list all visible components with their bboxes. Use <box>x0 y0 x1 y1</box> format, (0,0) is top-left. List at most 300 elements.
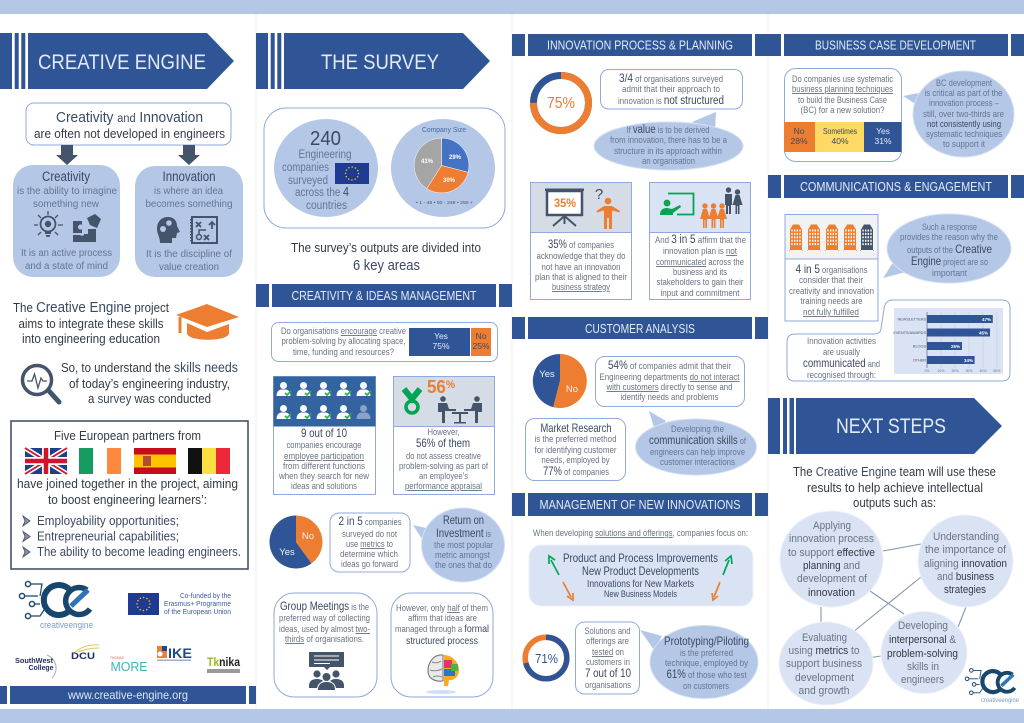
panel: innovation: is where an idea <box>154 185 223 197</box>
bullets <box>23 514 241 559</box>
banner: The Survey <box>256 33 490 89</box>
node: interpersonal skills: Developing <box>898 620 948 632</box>
panel: 9 out of 10: from different functions <box>283 461 365 471</box>
panel: communication channels <box>787 300 1010 381</box>
circle: company size pie: 30% <box>443 178 456 184</box>
callout: prototyping: on customers <box>683 681 729 691</box>
panel: creativity: It is an active process <box>21 247 112 259</box>
panel: group meetings: preferred way of collecting <box>279 613 370 623</box>
text box: tested on customers: tested on <box>592 647 624 657</box>
node: planning: planning and <box>803 560 860 572</box>
pie: metrics yes/no: No <box>302 531 314 542</box>
bar chart: 30% <box>965 369 973 373</box>
banner: The Survey: THE SURVEY <box>321 51 439 74</box>
circle: company size pie: • 1 - 49 • 50 - 249 • 250 + <box>416 200 473 205</box>
panel: 4 in 5: consider that their <box>799 275 863 285</box>
icon: head with gears <box>157 217 180 243</box>
panel: formal process: However, only half of them <box>396 603 488 613</box>
callout: BC development: to support it <box>943 139 985 149</box>
circle: 240 companies: across the 4 <box>295 185 349 199</box>
callout: why Creative Engine <box>883 214 1011 283</box>
text: skills needs: So, to understand the skills needs <box>61 360 238 375</box>
bar chart: 47% <box>982 317 991 322</box>
bar chart: BLOGS <box>913 344 926 348</box>
panel: communication channels: Innovation activities <box>807 336 876 346</box>
logo: Creative Engine <box>19 581 93 630</box>
panel: formal process: managed through a formal <box>395 623 489 635</box>
header: communications <box>768 175 1024 198</box>
panel: 56 percent: problem-solving as part of <box>399 461 488 471</box>
text box: not structured <box>600 70 742 109</box>
text box: tested on customers <box>576 622 640 694</box>
logo: DCU: DCU <box>71 651 95 661</box>
text: skills needs <box>61 360 238 406</box>
panel: communication channels: recognised through: <box>807 370 876 380</box>
node: alignment: aligning innovation <box>924 558 1007 570</box>
header: creativity and ideas: CREATIVITY & IDEAS MANAGEMENT <box>292 289 477 303</box>
header: customer analysis <box>512 317 768 339</box>
panel: focus areas: Product and Process Improvements <box>563 551 718 565</box>
header: management of new innovations <box>512 493 768 516</box>
panel: creativity <box>13 165 120 277</box>
header: creativity and ideas <box>256 284 512 307</box>
callout: return on investment <box>413 508 504 582</box>
callout: BC development: still, over two-thirds are <box>923 109 1004 119</box>
panel: 56 percent: do not assess creative <box>406 451 481 461</box>
icon: presentation board: 35% <box>554 196 576 210</box>
text box: 2 in 5: 2 in 5 companies <box>338 514 402 528</box>
header: management of new innovations: MANAGEMENT OF NEW INNOVATIONS <box>540 498 740 512</box>
logo: Thomas More: MORE <box>110 659 148 674</box>
donut: 75 percent <box>534 76 588 130</box>
intro box <box>26 103 231 145</box>
node: planning <box>780 511 883 607</box>
node: interpersonal skills <box>881 612 967 694</box>
circle: 240 companies: companies <box>282 162 329 174</box>
callout: return on investment: the ones that do <box>435 560 492 570</box>
panel: creativity: Creativity <box>42 169 90 184</box>
panel: encourage question: time, funding and resources? <box>293 347 394 357</box>
panel: 3 in 5: innovation plan is not <box>663 246 737 256</box>
callout: value structure: structure in its approach within <box>614 146 722 156</box>
panel: 56 percent: 56 <box>427 377 447 397</box>
callout: why Creative Engine: outputs of the Creative <box>907 242 992 256</box>
panel: 3 in 5: stakeholders to gain their <box>656 277 744 287</box>
text box: market research: Market Research <box>540 421 612 435</box>
panel: 35 percent: acknowledge that they do <box>536 251 626 261</box>
text box: tested on customers: Solutions and <box>584 626 630 636</box>
callout: prototyping: Prototyping/Piloting <box>664 634 749 648</box>
header label: business case: BUSINESS CASE DEVELOPMENT <box>815 38 976 52</box>
panel: formal process <box>391 593 493 697</box>
flag: Ireland <box>79 448 121 474</box>
circle: company size pie: Company Size <box>422 127 466 134</box>
callout: why Creative Engine: provides the reason why the <box>900 232 998 242</box>
bar chart: 10% <box>937 369 945 373</box>
circle: company size pie: 29% <box>449 155 462 161</box>
callout: value structure: If value is to be derived <box>626 124 710 136</box>
text: six key areas: 6 key areas <box>353 257 420 274</box>
panel: 4 in 5: training needs are <box>800 296 862 306</box>
panel: 9 out of 10 <box>274 376 376 494</box>
callout: BC development: systematic techniques <box>926 129 1002 139</box>
text: project aims: into engineering education <box>22 332 160 346</box>
bar chart <box>893 308 1003 374</box>
node: interpersonal skills: skills in <box>907 661 939 673</box>
node: alignment: strategies <box>944 584 986 596</box>
panel: 35 percent: 35% of companies <box>548 239 614 251</box>
text box: market research: for identifying customer <box>534 445 616 455</box>
icon: graduation cap <box>176 304 239 340</box>
bar: no, sometimes, yes: 40% <box>831 136 849 146</box>
panel: 35 percent <box>530 182 632 300</box>
bullets: Employability opportunities; <box>37 514 179 528</box>
panel: business planning question: (BC) for a new solution? <box>800 105 884 115</box>
text box: market research <box>526 418 626 480</box>
panel: creativity: and a state of mind <box>25 260 108 272</box>
logo: Creative Engine small <box>965 669 1020 704</box>
logo: Erasmus+ co-funding: Erasmus+ Programme <box>164 599 231 608</box>
icon: puzzle <box>73 214 101 242</box>
logo: South West College: SouthWest <box>15 656 53 665</box>
callout: return on investment: Return on <box>443 513 484 527</box>
bar chart: NEWSLETTERS <box>898 318 926 322</box>
panel: 9 out of 10: when they search for new <box>278 471 369 481</box>
callout: prototyping: is the preferred <box>680 648 733 658</box>
icon: person shrugging: ? <box>595 186 603 203</box>
icon: chat and people <box>309 652 344 690</box>
panel: business planning question <box>784 68 902 162</box>
circle: 240 companies: surveyed <box>288 175 328 187</box>
text box: tested on customers: 7 out of 10 <box>585 668 631 680</box>
panel: focus areas: Innovations for New Markets <box>587 578 694 590</box>
logo: IKE <box>157 645 192 661</box>
text box: 2 in 5: ideas go forward <box>341 559 398 569</box>
circle: company size pie <box>391 119 495 217</box>
panel: 56 percent: performance appraisal <box>405 481 482 491</box>
circle: 240 companies: Engineering <box>298 149 352 161</box>
panel: European partners <box>11 421 248 569</box>
panel: creativity: is the ability to imagine <box>17 185 117 197</box>
arrow: to innovation <box>178 145 200 165</box>
pie: customer interaction: No <box>566 384 578 395</box>
bar chart: OTHER <box>913 358 926 362</box>
node: alignment: the importance of <box>925 544 1007 556</box>
logo: South West College <box>15 655 56 678</box>
callout: communication skills: communication skills of <box>649 433 746 447</box>
arrow: to creativity <box>56 145 78 165</box>
icon: meeting at table <box>438 396 482 424</box>
donut: 71 percent <box>525 637 567 679</box>
text: skills needs: a survey was conducted <box>88 392 211 406</box>
bar chart: 20% <box>951 369 959 373</box>
text: six key areas: The survey’s outputs are divided into <box>291 240 481 255</box>
text: next steps intro: The Creative Engine team will use these <box>793 464 996 479</box>
donut: 71 percent: 71% <box>535 651 558 666</box>
panel: focus areas: New Business Models <box>604 589 677 599</box>
flag: Belgium <box>188 448 230 474</box>
icon: brain <box>426 655 459 694</box>
bar: yes 75 / no 25: 75% <box>432 341 450 351</box>
logo: Tknika: Tknika <box>207 655 240 669</box>
panel: 4 in 5: not fully fulfilled <box>803 307 859 317</box>
panel: group meetings: Group Meetings is the <box>280 599 369 613</box>
circle: 240 companies: 240 <box>310 128 341 150</box>
text box: 2 in 5: use metrics to <box>346 539 393 549</box>
bar: yes 75 / no 25: No <box>476 331 487 341</box>
bullets: The ability to become leading engineers. <box>37 545 241 559</box>
panel: European partners: Five European partners from <box>54 429 201 443</box>
callout: return on investment: the most popular <box>434 540 493 550</box>
panel: group meetings: ideas, used by almost two- <box>279 624 370 634</box>
banner: Creative Engine: CREATIVE ENGINE <box>38 51 206 74</box>
bar chart: 25% <box>951 344 960 349</box>
panel: creativity: something new <box>33 198 99 210</box>
panel: 56 percent <box>394 376 494 494</box>
panel: 4 in 5 <box>785 214 878 321</box>
bar chart: 40% <box>979 369 987 373</box>
panel: 35 percent: not have an innovation <box>542 262 620 272</box>
panel: 56 percent: 56% of them <box>416 436 470 450</box>
flag: Spain <box>134 448 176 474</box>
node: metrics <box>779 622 873 705</box>
bar chart: EVENTS/AWARDS <box>893 331 926 335</box>
bar: no, sometimes, yes <box>784 122 902 152</box>
text box: market research: 77% of companies <box>543 466 609 478</box>
panel: 9 out of 10: companies encourage <box>286 440 362 450</box>
callout: value structure <box>594 112 743 170</box>
node: planning: innovation process <box>789 533 874 545</box>
bar: yes 75 / no 25 <box>409 328 491 356</box>
panel: communication channels: communicated and <box>803 356 880 370</box>
node: alignment: Understanding <box>933 531 999 543</box>
text box: not structured: 3/4 of organisations surveyed <box>619 71 723 85</box>
bar: no, sometimes, yes: 28% <box>790 136 808 146</box>
callout: communication skills: customer interactions <box>660 457 735 467</box>
node: metrics: support business <box>786 658 862 670</box>
bar chart: 34% <box>964 358 973 363</box>
callout: BC development <box>903 71 1014 157</box>
node: interpersonal skills: problem-solving <box>887 648 958 660</box>
node: metrics: and growth <box>798 685 850 697</box>
header: innovation process: INNOVATION PROCESS & PLANNING <box>547 38 733 52</box>
circle: 240 companies: countries <box>306 200 347 212</box>
text box: 54 percent: 54% of companies admit that their <box>608 360 731 372</box>
panel: focus areas: New Product Developments <box>582 564 699 578</box>
text: project aims <box>13 300 169 346</box>
text box: not structured: innovation is not structured <box>618 95 724 107</box>
panel: 4 in 5: creativity and innovation <box>789 286 874 296</box>
panel: innovation: value creation <box>159 261 219 273</box>
panel: encourage question <box>272 322 498 362</box>
callout: value structure: from innovation, there has to be a <box>610 135 728 145</box>
panel: innovation: It is the discipline of <box>146 248 232 260</box>
text: project aims: The Creative Engine project <box>13 300 169 316</box>
header: innovation process <box>512 34 1024 56</box>
header: communications: COMMUNICATIONS & ENGAGEMENT <box>800 180 992 194</box>
panel: 9 out of 10: employee participation <box>284 451 364 461</box>
panel: 3 in 5 <box>650 182 750 300</box>
text box: market research: needs, employed by <box>542 455 610 465</box>
bottom band <box>0 709 1024 723</box>
node: interpersonal skills: interpersonal & <box>889 634 957 646</box>
node: metrics: development <box>795 672 854 684</box>
text box: tested on customers: organisations <box>585 680 631 690</box>
callout: why Creative Engine: Engine project are so <box>911 254 988 268</box>
node: alignment <box>918 515 1013 607</box>
callout: communication skills <box>636 411 756 475</box>
diagram: intellectual outputs <box>779 511 1013 705</box>
logo: Creative Engine small: creativeengine <box>981 698 1020 704</box>
panel: business planning question: to build the Business Case <box>798 95 887 105</box>
bar chart: 50% <box>993 369 1001 373</box>
panel: focus areas <box>529 545 753 606</box>
text: focus intro: When developing solutions and offerings, companies focus on: <box>533 528 748 538</box>
node: planning: to support effective <box>788 547 875 559</box>
node: metrics: using metrics to <box>788 645 860 657</box>
node: metrics: Evaluating <box>802 632 847 644</box>
node: planning: development of <box>797 573 868 585</box>
callout: prototyping: 61% of those who test <box>666 669 747 681</box>
panel: 4 in 5: 4 in 5 organisations <box>796 262 868 276</box>
icon: orange team <box>700 203 727 228</box>
callout: return on investment: Investment is <box>436 526 491 540</box>
panel: business planning question: business planning techniques <box>792 84 893 94</box>
text box: not structured: admit that their approach to <box>622 84 720 94</box>
callout: why Creative Engine: Such a response <box>922 222 977 232</box>
panel: 56 percent: However, <box>428 427 460 437</box>
circle: 240 companies <box>274 119 378 217</box>
panel: 56 percent: % <box>446 379 455 391</box>
panel: business planning question: Do companies use systematic <box>792 74 893 84</box>
panel: group meetings <box>274 593 377 697</box>
panel: 3 in 5: business and its <box>673 267 727 277</box>
text box: 2 in 5: determine which <box>340 549 398 559</box>
text: six key areas <box>291 240 481 274</box>
bar: yes 75 / no 25: Yes <box>434 331 448 341</box>
icon: magnifier <box>22 366 59 402</box>
panel: 35 percent: business strategy <box>552 282 610 292</box>
node: alignment: and business <box>937 571 994 583</box>
panel: innovation <box>135 166 243 277</box>
text box: 54 percent: Engineering departments do not interact <box>600 372 740 382</box>
panel: encourage question: problem-solving by allocating space, <box>282 336 406 346</box>
donut: 75 percent: 75% <box>547 95 575 112</box>
panel: group meetings: thirds of organisations. <box>285 634 364 644</box>
bar: no, sometimes, yes: Yes <box>876 126 890 136</box>
pie: customer interaction: Yes <box>539 369 555 380</box>
panel: encourage question: Do organisations encourage creative <box>281 326 406 336</box>
banner: Next Steps: NEXT STEPS <box>836 415 946 438</box>
logo: DCU <box>71 645 99 661</box>
logo: Erasmus+ co-funding: Co-funded by the <box>180 591 231 600</box>
banner: Next Steps <box>768 398 1002 454</box>
panel: European partners: to boost engineering learners’: <box>48 493 207 507</box>
callout: prototyping: technique, employed by <box>665 658 748 668</box>
text box: 54 percent: with customers directly to sense and <box>606 382 732 392</box>
node: interpersonal skills: engineers <box>901 674 944 686</box>
panel: 56 percent: an employee’s <box>419 471 468 481</box>
text box: 2 in 5 <box>330 513 410 572</box>
panel: formal process: structured process <box>406 635 478 647</box>
text box: 54 percent: identify needs and problems <box>620 392 719 402</box>
icon: medal <box>404 389 420 413</box>
text: next steps intro: results to help achieve intellectual <box>807 480 983 495</box>
banner: Creative Engine <box>0 33 234 89</box>
bullets: Entrepreneurial capabilities; <box>37 530 179 544</box>
logo: Erasmus+ co-funding <box>128 591 231 616</box>
footer: website bar: www.creative-engine.org <box>67 688 188 702</box>
bar chart: 0% <box>924 369 930 373</box>
text box: tested on customers: customers in <box>586 657 630 667</box>
arrows: up and down <box>549 556 732 600</box>
panel: 3 in 5: input and commitment <box>660 288 740 298</box>
logo: Thomas More: THOMAS <box>110 655 124 660</box>
icon: EU flag <box>335 163 369 184</box>
icon: light bulb <box>34 211 63 237</box>
panel: European partners: have joined together in the project, aiming <box>17 477 238 491</box>
text: next steps intro: outputs such as: <box>853 495 936 510</box>
footer: website bar <box>0 686 256 704</box>
pie: metrics yes/no <box>269 515 322 568</box>
callout: BC development: BC development <box>936 78 992 88</box>
header: customer analysis: CUSTOMER ANALYSIS <box>585 322 695 336</box>
panel: formal process: affirm that ideas are <box>408 613 477 623</box>
bar chart: 45% <box>979 330 988 336</box>
panel: 35 percent: plan that is aligned to their <box>535 272 627 282</box>
flag: UK <box>25 448 67 474</box>
node: planning: innovation <box>808 587 855 599</box>
callout: prototyping <box>640 626 758 698</box>
panel: 9 out of 10: ideas and solutions <box>291 481 357 491</box>
callout: value structure: an organisation <box>642 156 695 166</box>
intro box: are often not developed in engineers <box>34 127 225 141</box>
logo: IKE: IKE <box>168 645 192 661</box>
circle: company size pie: 41% <box>421 159 434 165</box>
bar: no, sometimes, yes: 31% <box>874 136 892 146</box>
panel: communication channels: are usually <box>823 347 860 357</box>
panel: 9 out of 10: 9 out of 10 <box>301 426 347 440</box>
panel: 3 in 5: communicated across the <box>656 257 744 267</box>
text: project aims: aims to integrate these skills <box>18 317 164 331</box>
callout: return on investment: metric amongst <box>435 550 490 560</box>
icon: teacher at green board <box>660 194 694 215</box>
panel: survey facts <box>264 108 505 228</box>
panel: 3 in 5: And 3 in 5 affirm that the <box>655 234 746 246</box>
logo: Creative Engine: creativeengine <box>40 620 93 630</box>
text box: 2 in 5: surveyed do not <box>342 529 397 539</box>
text: next steps intro <box>793 464 996 510</box>
callout: BC development: is critical as part of the <box>924 88 1002 98</box>
icon: dark couple <box>725 187 742 214</box>
bar: no, sometimes, yes: No <box>794 126 805 136</box>
icon: buildings <box>789 224 874 250</box>
pie: metrics yes/no: Yes <box>279 547 295 558</box>
callout: BC development: not consistently using <box>927 119 1001 129</box>
top band <box>0 0 1024 14</box>
callout: communication skills: engineers can help improve <box>650 447 745 457</box>
bar: yes 75 / no 25: 25% <box>472 341 490 351</box>
text box: 54 percent <box>596 356 744 406</box>
bar: no, sometimes, yes: Sometimes <box>823 126 857 136</box>
callout: why Creative Engine: important <box>932 268 967 278</box>
icon: strategy notebook <box>191 217 217 243</box>
text box: tested on customers: offerings are <box>586 636 629 646</box>
callout: communication skills: Developing the <box>671 424 724 434</box>
logo: Erasmus+ co-funding: of the European Union <box>164 607 231 616</box>
intro box: Creativity and Innovation <box>56 110 203 126</box>
icon: people with ticks <box>276 382 371 419</box>
